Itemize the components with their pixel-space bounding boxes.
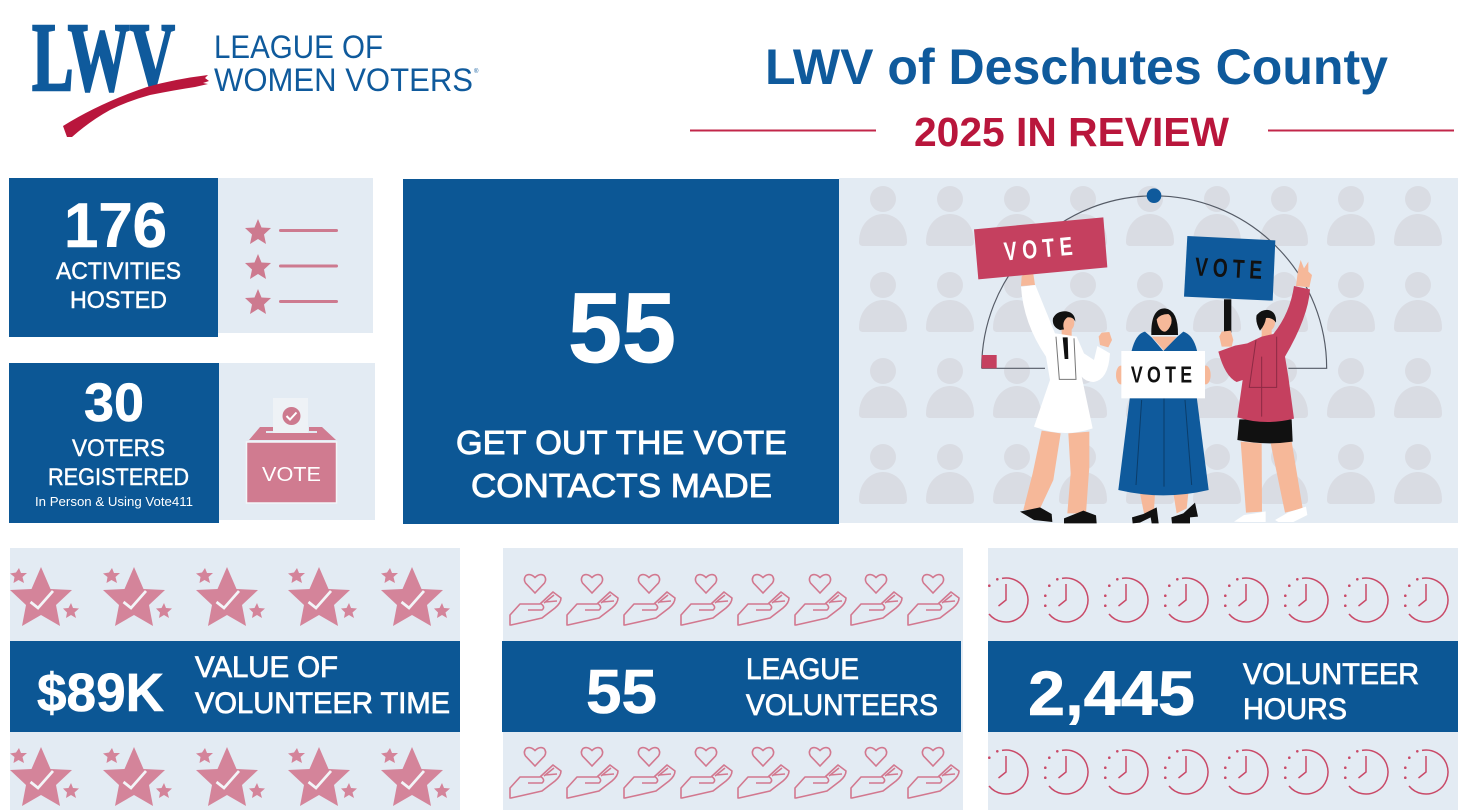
illustration: three voters with signs xyxy=(974,188,1327,523)
label: volunteer hours: HOURS xyxy=(1243,693,1347,726)
panel: volunteer hours xyxy=(984,548,1458,810)
icons: clock row top xyxy=(984,578,1448,622)
panel: value of volunteer time xyxy=(10,548,460,810)
woman in blue dress: VOTE xyxy=(1131,362,1196,388)
man in red shirt xyxy=(1218,260,1312,522)
blue vote sign xyxy=(1184,236,1275,301)
gauge arc xyxy=(982,188,1327,368)
subtitle: 2025 in review: 2025 IN REVIEW xyxy=(914,109,1229,155)
label: get out the vote contacts made xyxy=(456,424,787,504)
label: voters registered: In Person & Using Vote411 xyxy=(35,494,193,509)
logo mark LWV: LWV xyxy=(32,4,175,112)
panel: get out the vote xyxy=(403,178,1458,524)
icon: star checklist xyxy=(245,219,338,314)
stat: 55 contacts: 55 xyxy=(568,272,676,383)
title: LWV of Deschutes County xyxy=(765,39,1388,95)
panel: voters registered xyxy=(9,363,375,523)
woman in white dress xyxy=(1020,268,1112,523)
label: activities hosted: ACTIVITIES xyxy=(56,258,181,285)
label: league volunteers xyxy=(746,653,938,722)
woman in blue dress xyxy=(1116,308,1211,523)
stat: 2,445: 2,445 xyxy=(1028,659,1195,729)
icons: star row bottom xyxy=(10,747,450,806)
label: value of volunteer time: VOLUNTEER TIME xyxy=(195,687,450,720)
logo wordmark: ® xyxy=(474,68,479,75)
panel: league volunteers xyxy=(502,548,963,810)
label: get out the vote contacts made: GET OUT THE VOTE xyxy=(456,424,787,461)
label: league volunteers: LEAGUE xyxy=(746,653,859,686)
label: value of volunteer time: VALUE OF xyxy=(195,651,338,684)
label: volunteer hours: VOLUNTEER xyxy=(1243,658,1419,691)
icon: ballot box xyxy=(246,398,336,503)
stat: 176: 176 xyxy=(64,191,167,261)
label: value of volunteer time xyxy=(195,651,450,720)
logo red swoosh xyxy=(63,75,209,137)
label: voters registered: REGISTERED xyxy=(48,464,189,491)
label: volunteer hours xyxy=(1243,658,1419,726)
label: voters registered: VOTERS xyxy=(72,435,165,462)
crowd background xyxy=(859,186,1442,504)
icons: star row top xyxy=(10,567,450,626)
logo wordmark: LEAGUE OF xyxy=(214,29,383,65)
label: activities hosted xyxy=(56,258,181,314)
red vote sign: VOTE xyxy=(1003,230,1079,266)
icons: hand and heart row bottom xyxy=(510,748,959,798)
icon: ballot box: VOTE xyxy=(262,464,321,486)
label: activities hosted: HOSTED xyxy=(70,287,167,314)
logo wordmark xyxy=(214,29,479,98)
icons: clock row bottom xyxy=(984,750,1448,794)
red vote sign xyxy=(974,217,1107,279)
blue vote sign: VOTE xyxy=(1194,252,1268,285)
stat: $89K: $89K xyxy=(37,663,164,723)
stat: 30: 30 xyxy=(84,373,144,433)
logo wordmark: WOMEN VOTERS xyxy=(214,62,473,98)
label: league volunteers: VOLUNTEERS xyxy=(746,689,938,722)
logo: League of Women Voters xyxy=(32,4,479,137)
label: voters registered xyxy=(35,435,193,509)
icons: hand and heart row top xyxy=(510,575,959,625)
panel: activities hosted xyxy=(9,178,373,337)
stat: 55 volunteers: 55 xyxy=(586,658,657,727)
label: get out the vote contacts made: CONTACTS MADE xyxy=(471,467,772,504)
